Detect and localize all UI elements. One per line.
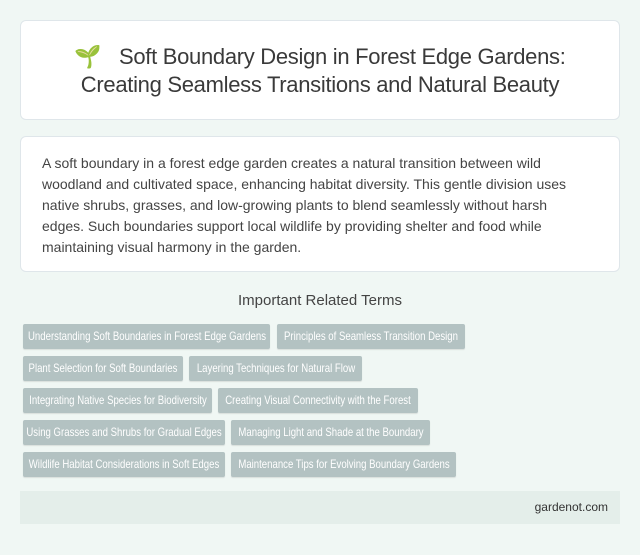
related terms heading: Important Related Terms [238,292,402,309]
description card [20,136,620,272]
tag 5 [23,388,212,413]
tag 2 [277,324,465,349]
tag 9: Wildlife Habitat Considerations in Soft Edges [29,457,219,471]
title card [20,20,620,120]
tag 10 [231,452,456,477]
tag 3: Plant Selection for Soft Boundaries [29,361,177,375]
tag 9 [23,452,225,477]
tag 3 [23,356,183,381]
tag 8 [231,420,430,445]
tag 4: Layering Techniques for Natural Flow [196,361,355,375]
title: Creating Seamless Transitions and Natural Beauty [81,72,559,97]
tag 7 [23,420,225,445]
tag 7: Using Grasses and Shrubs for Gradual Edges [26,425,222,439]
tag 1: Understanding Soft Boundaries in Forest Edge Gardens [27,329,266,343]
tag 10: Maintenance Tips for Evolving Boundary Gardens [238,457,449,471]
tag 6: Creating Visual Connectivity with the Forest [225,393,411,407]
tag 2: Principles of Seamless Transition Design [284,329,458,343]
footer [20,491,620,524]
tag 8: Managing Light and Shade at the Boundary [238,425,423,439]
title: 🌱 Soft Boundary Design in Forest Edge Gardens: [74,44,566,69]
footer source: gardenot.com [535,500,608,514]
title [74,44,566,97]
tag 6 [218,388,418,413]
tag 1 [23,324,270,349]
tag 4 [189,356,362,381]
tag 5: Integrating Native Species for Biodiversity [29,393,206,407]
description text: A soft boundary in a forest edge garden creates a natural transition between wild woodland and cultivated space, enhancing habitat diversity. This gentle division uses native shrubs, grasses, and low-growing plants to blend seamlessly without harsh edges. Such boundaries support local wildlife by providing shelter and food while maintaining visual harmony in the garden. [42,155,566,255]
